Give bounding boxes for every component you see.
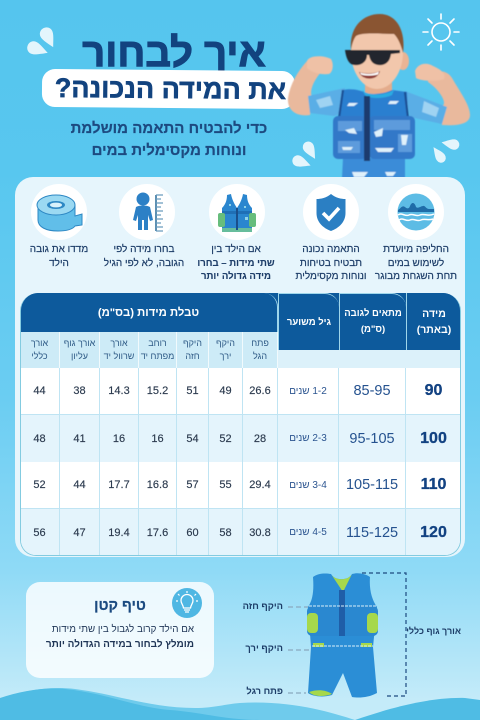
row: size 110: 52 bbox=[33, 479, 46, 491]
icon: safety shield bbox=[303, 184, 359, 240]
intro text: כדי להבטיח התאמה מושלמת bbox=[71, 120, 267, 137]
row: size 90: 15.2 bbox=[147, 385, 168, 397]
label: hip: היקף ירך bbox=[245, 642, 283, 653]
row: size 100: 2-3 שנים bbox=[289, 433, 327, 444]
row: size 120: 19.4 bbox=[108, 526, 130, 538]
row: size 100: 48 bbox=[33, 432, 46, 444]
row: size 90: 1-2 שנים bbox=[289, 386, 327, 396]
text: between two sizes: שתי מידות – בחרו bbox=[197, 258, 275, 269]
header: measurement column names: שרוול יד bbox=[104, 351, 134, 361]
tip text: אם הילד קרוב לגבול בין שתי מידות bbox=[52, 624, 194, 635]
header: measurement column names: הגל bbox=[253, 351, 267, 361]
text: between two sizes bbox=[197, 244, 275, 282]
tip text bbox=[46, 624, 194, 650]
text: choose by height: בחרו מידה לפי bbox=[114, 244, 174, 255]
header: height range bbox=[339, 293, 406, 350]
intro text bbox=[70, 120, 267, 158]
row: size 90: 14.3 bbox=[108, 385, 130, 397]
header: measurement column names: ירך bbox=[220, 351, 231, 361]
row: size 90: 85-95 bbox=[353, 383, 391, 399]
row: size 90: 44 bbox=[33, 385, 46, 397]
header: size: (באתר) bbox=[417, 324, 451, 336]
text: between two sizes: מידה גדולה יותר bbox=[201, 271, 271, 282]
icon: water drops center bbox=[291, 140, 320, 171]
row: size 110: 16.8 bbox=[147, 479, 168, 491]
header: measurements table title bbox=[20, 293, 278, 332]
row: size 100: 28 bbox=[254, 432, 266, 444]
tip heading: טיף קטן bbox=[94, 598, 146, 614]
row: size 120: 47 bbox=[73, 526, 86, 538]
row: size 100: 16 bbox=[113, 432, 125, 444]
subtitle text: את המידה הנכונה? bbox=[55, 73, 286, 105]
row: size 110: 110 bbox=[421, 476, 446, 493]
measure guide: overall length bbox=[362, 573, 406, 696]
header: height range: מתאים לגובה bbox=[344, 308, 402, 319]
size table bbox=[20, 293, 461, 556]
row: size 120: 4-5 שנים bbox=[289, 527, 327, 538]
table header bbox=[21, 293, 460, 368]
illustration: boy bbox=[288, 14, 470, 178]
row: size 120: 60 bbox=[186, 526, 199, 538]
icon: water and swimmers bbox=[388, 184, 444, 240]
measure guide: chest, hip, leg bbox=[288, 607, 310, 693]
row: size 120 bbox=[20, 508, 461, 556]
header: measurement column names: אורך bbox=[110, 338, 128, 348]
row: size 100: 52 bbox=[219, 432, 232, 444]
header: measurements table title: טבלת מידות (בס"מ) bbox=[98, 306, 199, 318]
panel: info and size table bbox=[15, 177, 465, 557]
icon: sun bbox=[423, 14, 459, 50]
text: correct fit: התאמה נכונה bbox=[302, 244, 360, 255]
header: measurement column names: חזה bbox=[185, 351, 200, 361]
header: measurement column names: רוחב bbox=[148, 338, 167, 348]
intro text: ונוחות מקסימלית במים bbox=[92, 142, 246, 158]
header: size bbox=[406, 293, 461, 350]
row: size 120: 58 bbox=[219, 526, 232, 538]
label: leg opening: פתח רגל bbox=[246, 685, 283, 696]
title: איך לבחור bbox=[82, 31, 266, 75]
header: size: מידה bbox=[422, 308, 446, 320]
row: size 100: 54 bbox=[186, 432, 199, 444]
header: measurement column names: היקף bbox=[216, 338, 235, 348]
row: size 110: 55 bbox=[219, 479, 232, 491]
header: height range: (ס"מ) bbox=[361, 324, 385, 335]
row: size 110 bbox=[20, 462, 461, 508]
text: measure height: הילד bbox=[49, 258, 69, 269]
icon: child height ruler bbox=[119, 184, 175, 240]
row: size 110: 3-4 שנים bbox=[289, 480, 327, 490]
row: size 90: 38 bbox=[73, 385, 86, 397]
icon: water drops left bbox=[25, 25, 59, 59]
header: measurement column names: אורך bbox=[31, 338, 48, 348]
row: size 120: 56 bbox=[33, 526, 46, 538]
text: choose by height bbox=[104, 244, 184, 269]
row: size 110: 57 bbox=[186, 479, 199, 491]
swimsuit bbox=[307, 573, 378, 698]
header: measurement column names: אורך גוף bbox=[64, 338, 95, 348]
label: chest: היקף חזה bbox=[243, 600, 283, 611]
text: correct fit: תבטיח בטיחות bbox=[300, 258, 362, 269]
row: size 90: 51 bbox=[186, 385, 199, 397]
icon: tape measure bbox=[31, 184, 87, 240]
row: size 120: 17.6 bbox=[147, 526, 168, 538]
row: size 110: 29.4 bbox=[249, 479, 271, 491]
icon: water drops right bbox=[430, 137, 460, 165]
row: size 90: 49 bbox=[219, 385, 232, 397]
header: measurement column names: מפתח יד bbox=[141, 351, 174, 361]
panel: small tip bbox=[26, 582, 214, 678]
row: size 110: 105-115 bbox=[346, 477, 398, 493]
row: size 120: 120 bbox=[420, 524, 447, 540]
row: size 90: 90 bbox=[425, 382, 442, 399]
header: measurement column names: כללי bbox=[31, 351, 48, 361]
row: size 100: 95-105 bbox=[349, 430, 395, 446]
subtitle pill bbox=[42, 69, 295, 109]
header: measurement column names: היקף bbox=[183, 338, 202, 348]
row: size 120: 115-125 bbox=[346, 524, 398, 540]
text: supervised use bbox=[374, 244, 457, 282]
text: choose by height: הגובה, לא לפי הגיל bbox=[104, 258, 184, 269]
text: correct fit bbox=[296, 244, 366, 282]
text: measure height bbox=[30, 244, 88, 269]
row: size 100 bbox=[20, 414, 461, 462]
text: between two sizes: אם הילד בין bbox=[211, 244, 261, 255]
label: overall length: אורך גוף כללי bbox=[406, 626, 461, 636]
header: measurement column names: פתח bbox=[251, 338, 269, 348]
header: estimated age bbox=[278, 293, 339, 350]
row: size 90: 26.6 bbox=[249, 385, 271, 397]
icon: flotation vest bbox=[209, 184, 265, 240]
tip text: מומלץ לבחור במידה הגדולה יותר bbox=[46, 638, 194, 650]
row: size 100: 41 bbox=[73, 432, 86, 444]
row: size 110: 17.7 bbox=[108, 479, 130, 491]
header: measurement column names bbox=[21, 332, 278, 368]
row: size 90 bbox=[20, 368, 461, 414]
row: size 120: 30.8 bbox=[249, 526, 271, 538]
text: supervised use: לשימוש במים bbox=[388, 258, 444, 269]
icon: light bulb bbox=[172, 588, 202, 618]
text: correct fit: ונוחות מקסימלית bbox=[296, 271, 366, 282]
text: supervised use: תחת השגחת מבוגר bbox=[375, 271, 457, 282]
text: supervised use: החליפה מיועדת bbox=[383, 244, 449, 255]
text: measure height: מדדו את גובה bbox=[30, 244, 88, 255]
row: size 100: 100 bbox=[420, 430, 447, 446]
row: size 110: 44 bbox=[73, 479, 86, 491]
header: measurement column names: עליון bbox=[71, 351, 88, 361]
row: size 100: 16 bbox=[151, 432, 164, 444]
header: estimated age: גיל משוער bbox=[287, 316, 331, 328]
